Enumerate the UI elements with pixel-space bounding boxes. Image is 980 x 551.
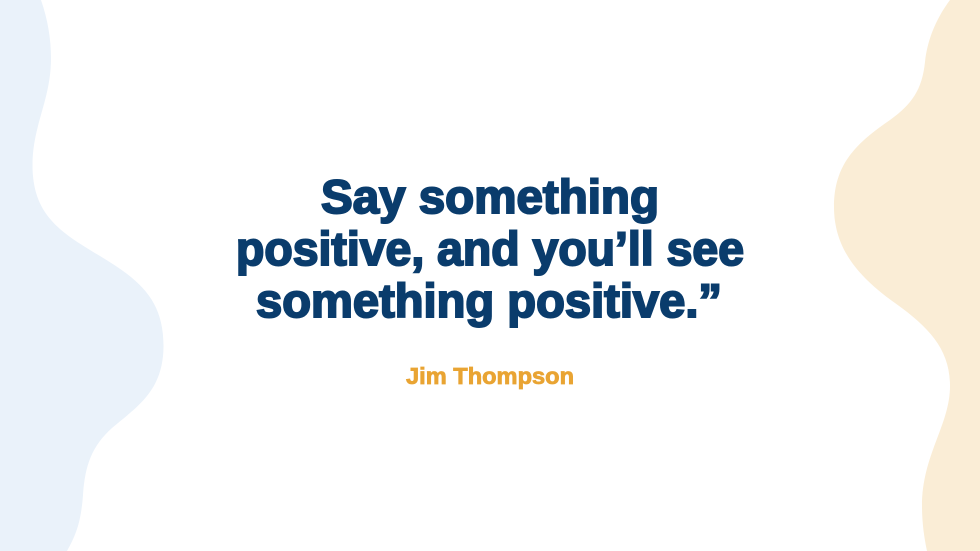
quote text: positive, and you’ll see <box>236 222 744 275</box>
attribution: Jim Thompson: Jim Thompson <box>406 363 574 389</box>
left blue wave shape <box>0 0 164 551</box>
right beige wave shape <box>834 0 980 551</box>
quote text <box>236 170 744 327</box>
quote text: something positive.” <box>256 274 722 327</box>
quote text: Say something <box>321 170 659 223</box>
